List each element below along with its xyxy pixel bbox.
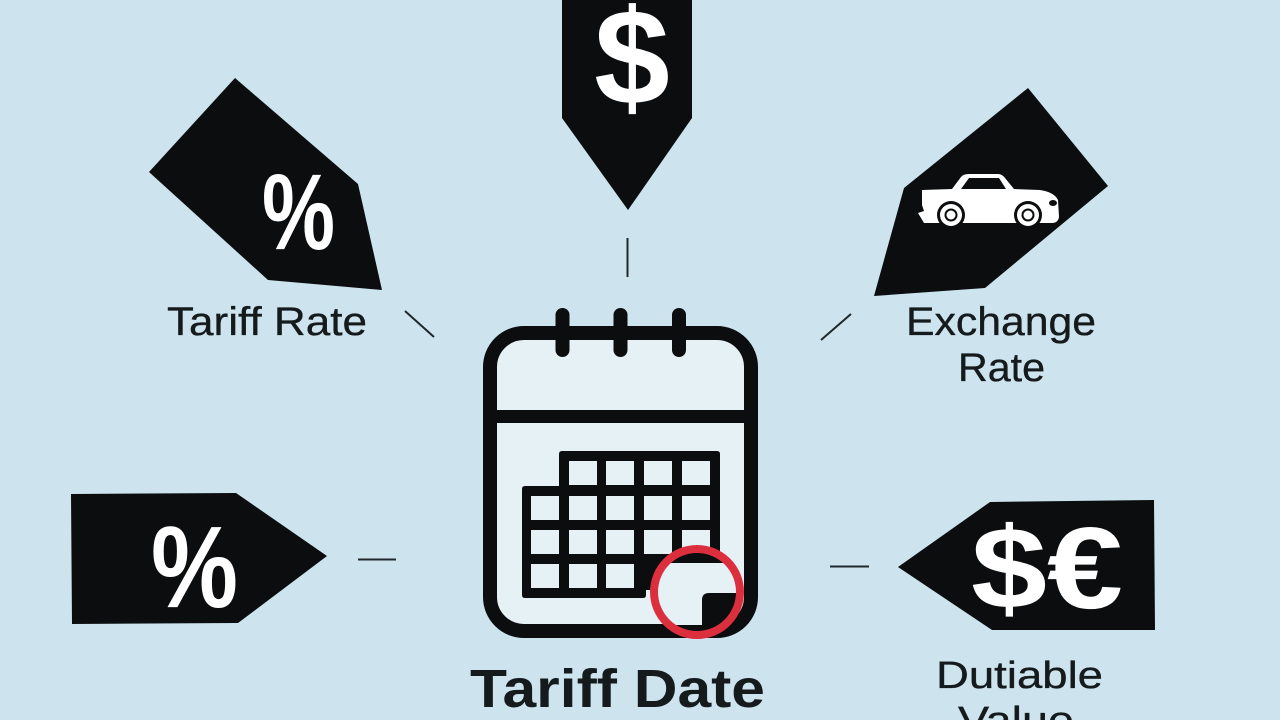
tag: dollar top <box>562 0 692 210</box>
icon: calendar <box>484 315 757 640</box>
label: exchange rate: Exchange <box>906 300 1096 344</box>
label: dutiable value: Dutiable <box>936 655 1103 697</box>
tag: dollar euro right: $€ <box>971 503 1123 633</box>
tag: percent left: % <box>151 502 238 632</box>
date highlight circle <box>650 545 744 640</box>
connector: right <box>830 566 869 568</box>
label: tariff rate: Tariff Rate <box>167 300 367 344</box>
label: dutiable value <box>936 655 1103 720</box>
tag: tariff rate percent <box>149 78 382 290</box>
tag: tariff rate percent: % <box>262 151 335 272</box>
tag: dollar euro right <box>898 500 1155 633</box>
tag: exchange rate car <box>874 88 1108 296</box>
title: Tariff Date <box>470 659 765 719</box>
icon: car <box>918 174 1059 229</box>
label: exchange rate <box>906 300 1096 390</box>
calendar rings <box>562 315 679 350</box>
tag: percent left <box>71 493 327 632</box>
calendar grid <box>522 451 720 598</box>
connector: left <box>358 558 396 560</box>
connector: upper right <box>821 314 851 340</box>
label: exchange rate: Rate <box>958 346 1045 390</box>
connector: top <box>626 238 628 277</box>
connector: upper left <box>405 311 434 337</box>
